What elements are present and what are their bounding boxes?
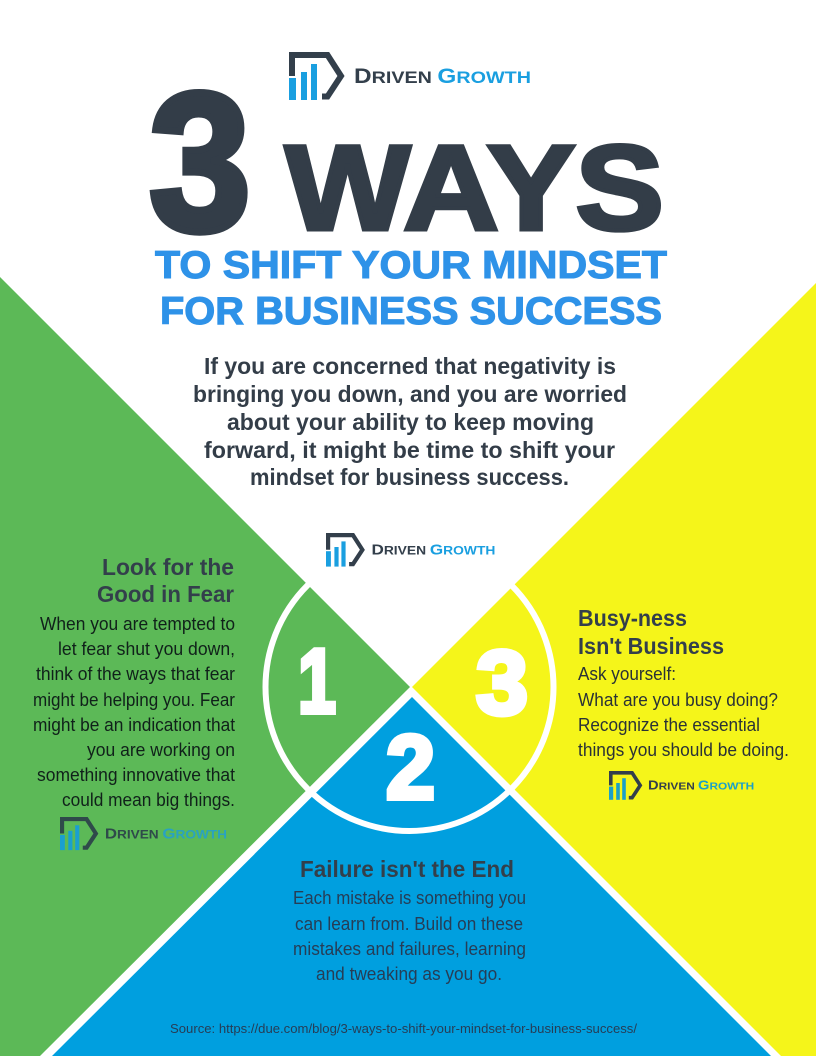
body text: fear: let fear shut you down, xyxy=(58,639,235,659)
heading: failure isn't the end: Failure isn't the End xyxy=(300,856,514,882)
intro text: bringing you down, and you are worried xyxy=(193,381,627,407)
heading: busy-ness isn't business xyxy=(578,605,724,659)
body text: fear: might be an indication that xyxy=(33,715,235,735)
logo: top xyxy=(289,55,531,100)
circle ring xyxy=(266,543,554,831)
panel text: look for the good in fear xyxy=(33,554,235,810)
panel text: failure xyxy=(293,856,526,984)
heading: busy-ness isn't business: Isn't Business xyxy=(578,633,724,659)
heading: look for the good in fear: Good in Fear xyxy=(97,581,234,607)
logo: yellow panel: DRIVEN GROWTH xyxy=(648,779,754,793)
body text: failure: Each mistake is something you xyxy=(293,888,526,908)
body text: fear: When you are tempted to xyxy=(40,614,235,634)
intro text: If you are concerned that negativity is xyxy=(204,353,616,379)
body text: failure: and tweaking as you go. xyxy=(316,964,502,984)
logo: yellow panel xyxy=(609,773,754,800)
subtitle: FOR BUSINESS SUCCESS xyxy=(160,290,662,333)
body text: busy-ness: things you should be doing. xyxy=(578,740,789,760)
number 1: 1 xyxy=(298,632,336,732)
logo: green panel xyxy=(60,819,227,850)
title: WAYS: WAYS xyxy=(285,120,664,256)
body text: fear xyxy=(33,614,235,810)
body text: busy-ness: What are you busy doing? xyxy=(578,690,778,710)
intro text: forward, it might be time to shift your xyxy=(204,437,615,463)
panel: blue triangle xyxy=(52,697,771,1056)
source line: Source: https://due.com/blog/3-ways-to-shift-your-mindset-for-business-success/ xyxy=(170,1022,638,1036)
logo: centre xyxy=(326,535,495,567)
logo: centre: DRIVEN GROWTH xyxy=(371,543,495,559)
body text: fear: could mean big things. xyxy=(62,790,235,810)
body text: failure xyxy=(293,888,526,984)
intro text: about your ability to keep moving xyxy=(227,409,594,435)
panel: yellow triangle xyxy=(412,283,816,1056)
subtitle xyxy=(155,244,667,333)
body text: fear: you are working on xyxy=(87,740,235,760)
number 3: 3 xyxy=(476,633,528,734)
intro text: mindset for business success. xyxy=(250,464,569,490)
logo: green panel: DRIVEN GROWTH xyxy=(105,826,227,842)
subtitle: TO SHIFT YOUR MINDSET xyxy=(155,244,667,287)
heading: look for the good in fear xyxy=(97,554,234,607)
logo: top: DRIVEN GROWTH xyxy=(354,65,531,88)
panel text: busy-ness xyxy=(578,605,789,760)
heading: look for the good in fear: Look for the xyxy=(102,554,234,580)
body text: fear: might be helping you. Fear xyxy=(33,690,235,710)
number 2: 2 xyxy=(386,718,435,818)
body text: fear: think of the ways that fear xyxy=(36,664,235,684)
body text: failure: mistakes and failures, learning xyxy=(293,939,526,959)
title: big 3: 3 xyxy=(149,52,251,272)
heading: busy-ness isn't business: Busy-ness xyxy=(578,605,687,631)
body text: failure: can learn from. Build on these xyxy=(295,914,523,934)
body text: busy-ness: Ask yourself: xyxy=(578,664,676,684)
body text: fear: something innovative that xyxy=(37,765,235,785)
intro text xyxy=(193,353,627,490)
body text: busy-ness: Recognize the essential xyxy=(578,715,760,735)
body text: busy-ness xyxy=(578,664,789,760)
panel: green triangle xyxy=(0,277,410,1056)
